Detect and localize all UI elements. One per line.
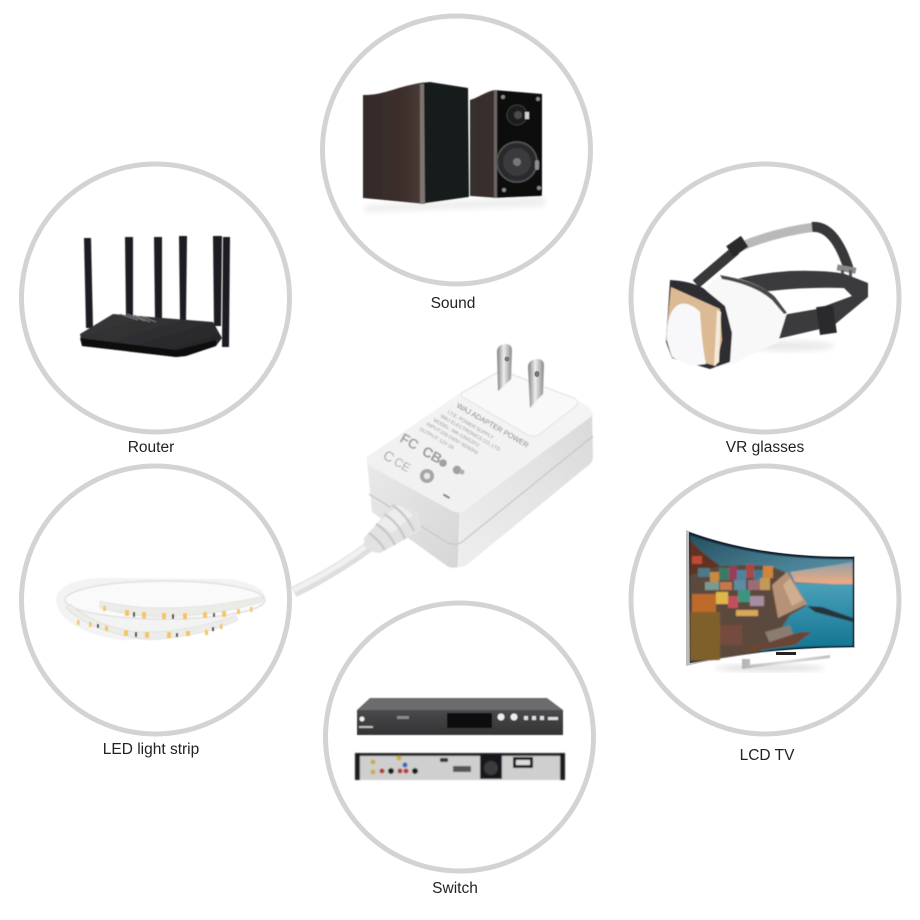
icon: router [80, 236, 230, 357]
cable of adapter [294, 544, 370, 592]
circle: VR glasses [631, 164, 899, 432]
adapter seam [369, 436, 593, 544]
icon: switch front panel [357, 698, 563, 735]
circle: router [22, 164, 290, 432]
label: Sound: Sound [431, 295, 475, 312]
regulatory text and marks: CE [392, 454, 413, 475]
regulatory text and marks: WAJ ELECTRONICS CO.,LTD [439, 414, 501, 453]
circle: sound [322, 16, 590, 284]
icon: bookshelf speakers [363, 82, 545, 212]
regulatory text and marks: MODEL: WA-12M12FU [432, 418, 480, 449]
label: Router: Router [128, 439, 174, 456]
label: LED light strip: LED light strip [103, 741, 199, 758]
regulatory text and marks: INPUT:100-240V~50/60Hz [425, 422, 480, 457]
panel: LCD TV [631, 466, 899, 764]
circle: switch [326, 603, 594, 871]
label: VR glasses: VR glasses [726, 439, 804, 456]
adapter left side [367, 460, 460, 568]
plug prong right [528, 359, 544, 408]
panel: VR glasses [631, 164, 899, 456]
panel: sound [322, 16, 590, 312]
adapter right side [458, 412, 593, 567]
strain relief [364, 502, 421, 553]
regulatory text and marks: FC [398, 430, 422, 453]
plug prong left [497, 344, 512, 391]
regulatory text and marks: C [380, 447, 397, 466]
power adapter [364, 344, 593, 568]
regulatory text and marks: OUTPUT: 12V 2A [418, 427, 456, 452]
icon: VR headset [666, 227, 868, 369]
plug plate [462, 372, 578, 436]
adapter top face [367, 370, 592, 512]
circle: LED light strip [22, 466, 290, 734]
regulatory text and marks [380, 401, 530, 499]
label: LCD TV: LCD TV [740, 747, 795, 764]
icon: LED strip reel [56, 578, 265, 640]
regulatory text and marks: I.T.E. POWER SUPPLY [446, 410, 495, 441]
icon: curved TV [686, 530, 855, 671]
regulatory text and marks: CB [420, 443, 445, 467]
panel: LED light strip [22, 466, 290, 758]
panel: router [22, 164, 290, 456]
icon: switch rear panel [355, 753, 565, 780]
regulatory text and marks: WAJ ADAPTER POWER [455, 401, 530, 450]
label: Switch: Switch [432, 880, 478, 897]
panel: switch [326, 603, 594, 897]
circle: LCD TV [631, 466, 899, 734]
